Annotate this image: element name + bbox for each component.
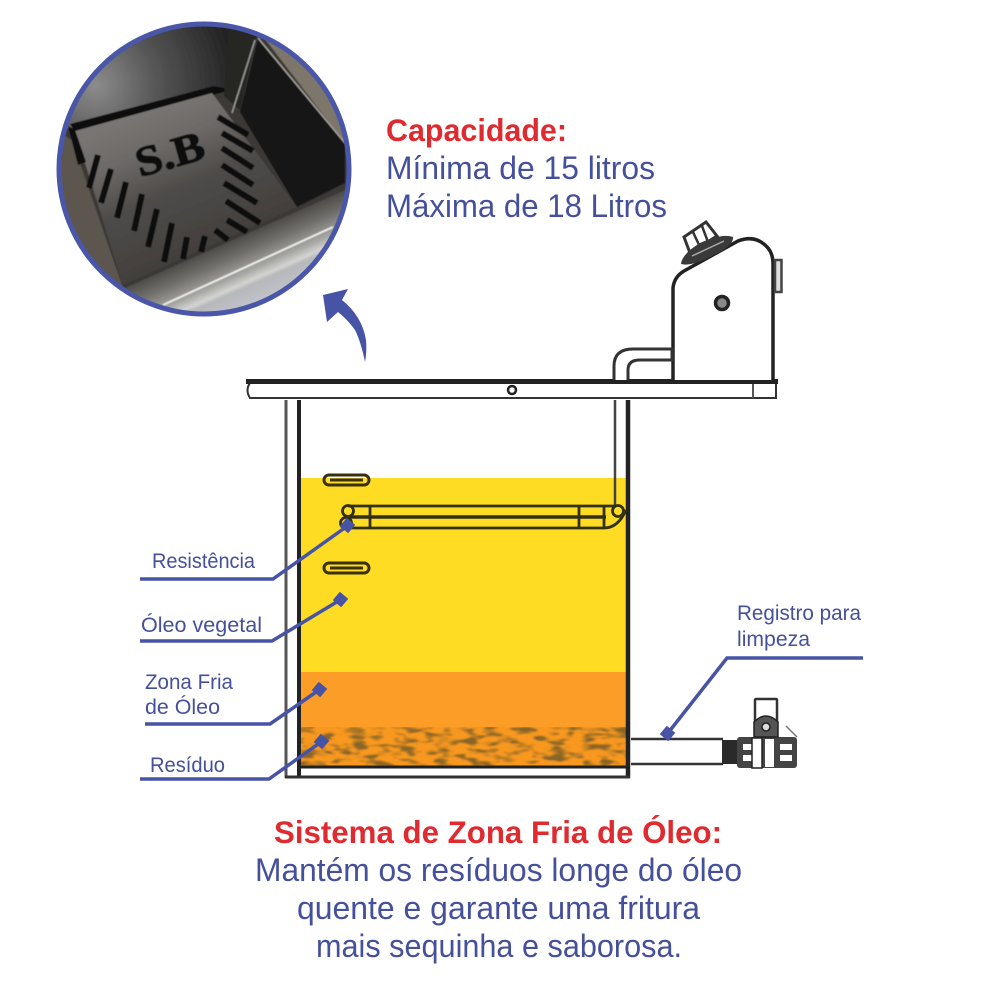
photo back wall	[68, 26, 234, 129]
photo corner	[224, 30, 258, 110]
fryer diagram	[246, 222, 797, 778]
oil: cold zone layer	[299, 672, 628, 727]
capacity text block: Máxima de 18 Litros	[386, 188, 667, 224]
bottom explanation text: Sistema de Zona Fria de Óleo:	[274, 814, 722, 850]
chain	[232, 40, 255, 113]
label: Registro para limpeza	[660, 601, 863, 741]
oil: vegetable oil layer	[299, 478, 628, 672]
label: Resistência: Resistência	[152, 549, 255, 573]
rim highlight	[163, 227, 333, 305]
bottom explanation text: quente e garante uma fritura	[297, 890, 701, 926]
label: Zona Fria de Óleo	[145, 670, 327, 724]
capacity text block: Mínima de 15 litros	[386, 150, 655, 186]
heating element pipe	[340, 506, 626, 528]
photo right wall	[240, 38, 345, 207]
label: Registro para limpeza: limpeza	[737, 627, 810, 651]
label: Registro para limpeza: Registro para	[737, 601, 861, 625]
photo front rim	[126, 190, 345, 312]
bottom explanation text	[255, 814, 742, 964]
drain pipe	[631, 739, 737, 764]
photo ring	[59, 24, 349, 314]
label: Zona Fria de Óleo: de Óleo	[145, 694, 220, 719]
basket slots	[89, 117, 260, 262]
label: Óleo vegetal	[140, 592, 348, 641]
bottom explanation text: mais sequinha e saborosa.	[316, 928, 682, 964]
side pipe	[614, 349, 672, 380]
infographic canvas	[56, 22, 863, 964]
photo floor	[75, 93, 297, 285]
photo back wall shadow	[70, 86, 232, 133]
photo left wall	[62, 136, 122, 286]
label: Resíduo: Resíduo	[150, 753, 225, 777]
photo right lip	[266, 40, 344, 140]
label: Resistência	[140, 518, 355, 579]
top plate	[246, 379, 778, 398]
left hook	[68, 126, 86, 165]
S.B logo: S.B	[130, 123, 210, 187]
label: Zona Fria de Óleo: Zona Fria	[145, 670, 233, 694]
lip edge	[258, 38, 345, 143]
label: Resíduo	[140, 734, 329, 779]
label: Óleo vegetal: Óleo vegetal	[141, 612, 262, 637]
thermostat knob	[681, 222, 733, 265]
bottom explanation text: Mantém os resíduos longe do óleo	[255, 852, 742, 888]
control box	[673, 239, 782, 380]
capacity text block: Capacidade:	[386, 112, 567, 148]
side slots	[324, 475, 369, 573]
capacity text block	[386, 112, 667, 224]
circular photo: perforated basket	[55, 20, 360, 320]
tank walls	[285, 400, 630, 778]
drain valve	[737, 699, 797, 768]
arrow: curved up to photo	[323, 289, 366, 362]
oil: residue layer	[299, 727, 628, 767]
